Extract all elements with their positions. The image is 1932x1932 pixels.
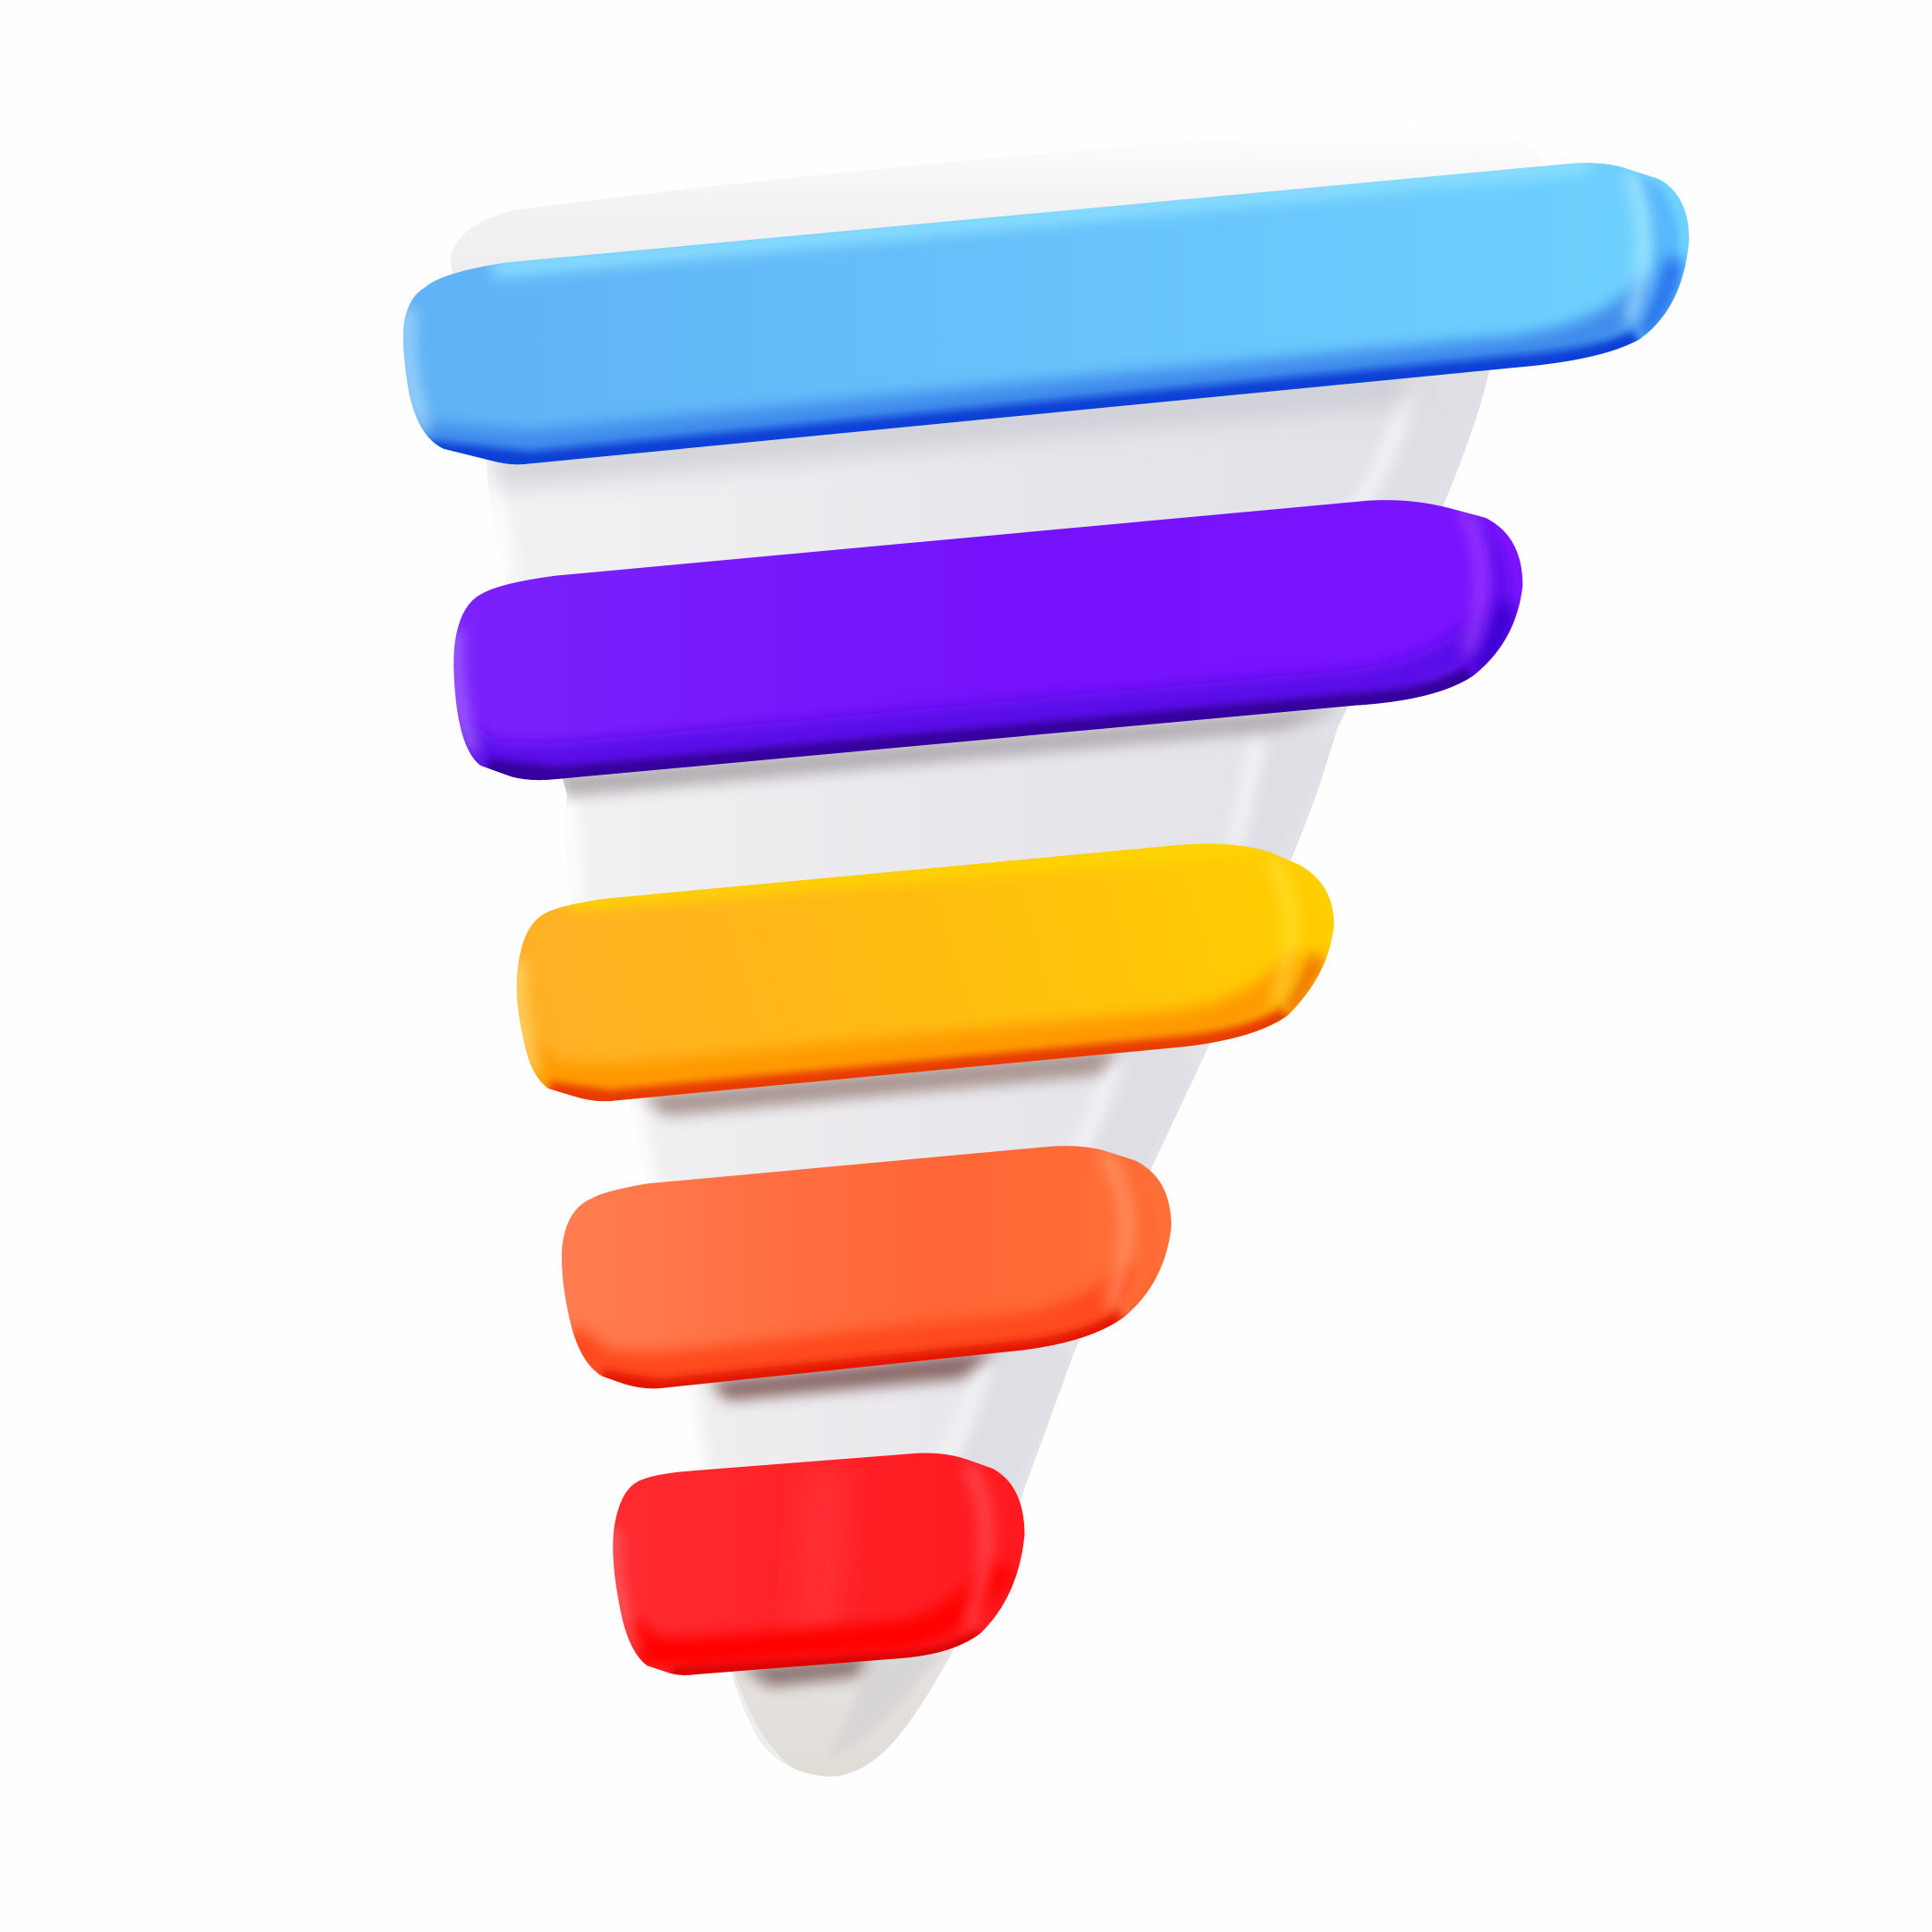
bar 3: yellow	[517, 843, 1334, 1101]
funnel left light edge	[488, 481, 708, 1470]
bar 1: blue	[403, 163, 1689, 464]
bar 5: red	[613, 1453, 1024, 1675]
funnel ridge highlight	[931, 382, 1411, 1469]
bar 4: orange	[562, 1146, 1172, 1388]
funnel tip	[733, 1650, 953, 1776]
shadows under bars	[493, 374, 1418, 483]
funnel right facet	[963, 1346, 1055, 1485]
bar 2: purple	[453, 500, 1522, 780]
funnel body	[419, 111, 1578, 1788]
